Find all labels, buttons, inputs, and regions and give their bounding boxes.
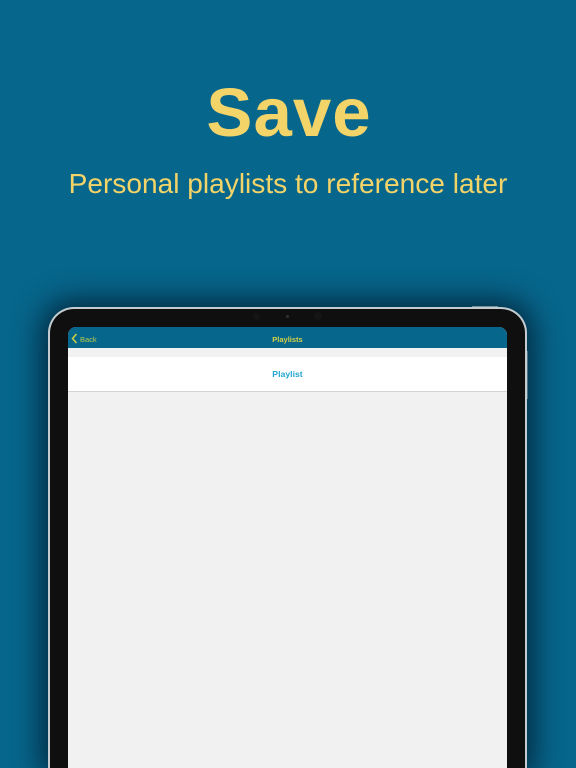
sensor left <box>253 313 260 320</box>
playlist row: Playlist <box>272 369 303 379</box>
playlist row <box>68 357 507 392</box>
navigation bar <box>68 327 507 348</box>
top side button <box>472 306 498 307</box>
back label: Back <box>80 335 97 344</box>
tablet device <box>23 282 552 768</box>
nav title: Playlists <box>272 335 303 344</box>
camera <box>286 315 289 318</box>
device body <box>48 307 527 768</box>
right side buttons <box>527 351 528 399</box>
icon: back chevron <box>72 334 77 344</box>
subtitle: Personal playlists to reference later <box>69 168 507 199</box>
sensor right <box>314 312 322 320</box>
app screen <box>68 327 507 768</box>
title: Save <box>206 74 372 151</box>
